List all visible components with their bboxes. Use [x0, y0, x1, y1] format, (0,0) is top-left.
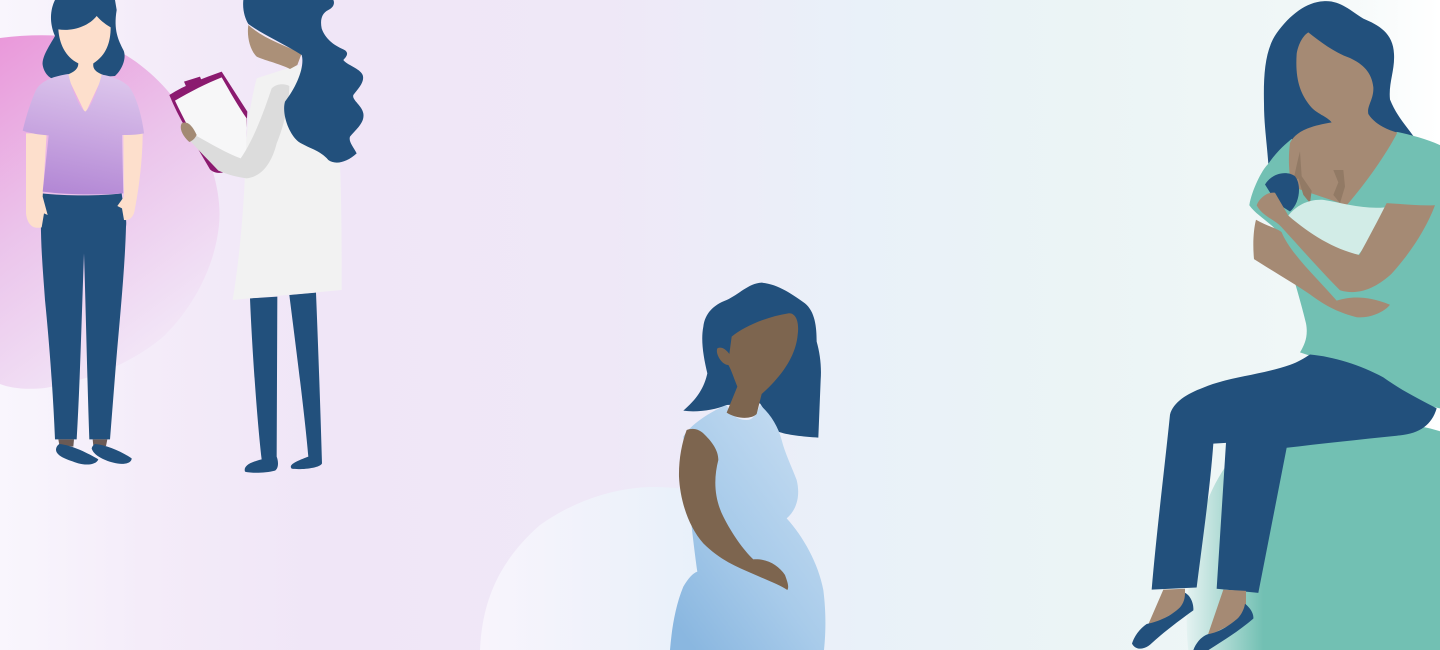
green blob behind breastfeeding mother	[1187, 422, 1440, 650]
shoes	[1132, 593, 1253, 650]
trouser legs and shoes	[245, 293, 322, 473]
trousers	[1152, 355, 1437, 593]
chest shadows	[1293, 151, 1345, 203]
figure: breastfeeding mother	[1132, 1, 1440, 650]
hand	[181, 122, 197, 142]
mother's arms	[1253, 193, 1435, 317]
hair	[1264, 1, 1413, 174]
figure: doctor in white coat	[169, 0, 364, 473]
face and neck	[58, 16, 111, 113]
hair	[243, 0, 364, 163]
ankles	[58, 439, 107, 447]
figure: patient woman in purple shirt	[23, 0, 144, 465]
shirt	[23, 74, 144, 194]
figure: pregnant woman in blue dress	[670, 283, 825, 650]
chest, neck and face	[1289, 32, 1397, 205]
sleeve	[189, 84, 289, 178]
trousers	[41, 193, 126, 439]
arm and face	[679, 313, 798, 590]
hair	[43, 0, 125, 80]
clipboard	[169, 72, 247, 173]
dress	[670, 405, 825, 650]
lab coat	[233, 65, 342, 300]
face	[248, 25, 302, 69]
baby blanket	[1288, 200, 1385, 255]
shins	[1147, 589, 1246, 636]
pink blob	[0, 35, 220, 389]
shirt	[1249, 132, 1440, 408]
pale blob behind pregnant woman	[480, 487, 730, 650]
arms	[26, 133, 143, 228]
shoes	[56, 444, 132, 465]
hair	[683, 283, 821, 438]
baby head	[1265, 173, 1299, 211]
